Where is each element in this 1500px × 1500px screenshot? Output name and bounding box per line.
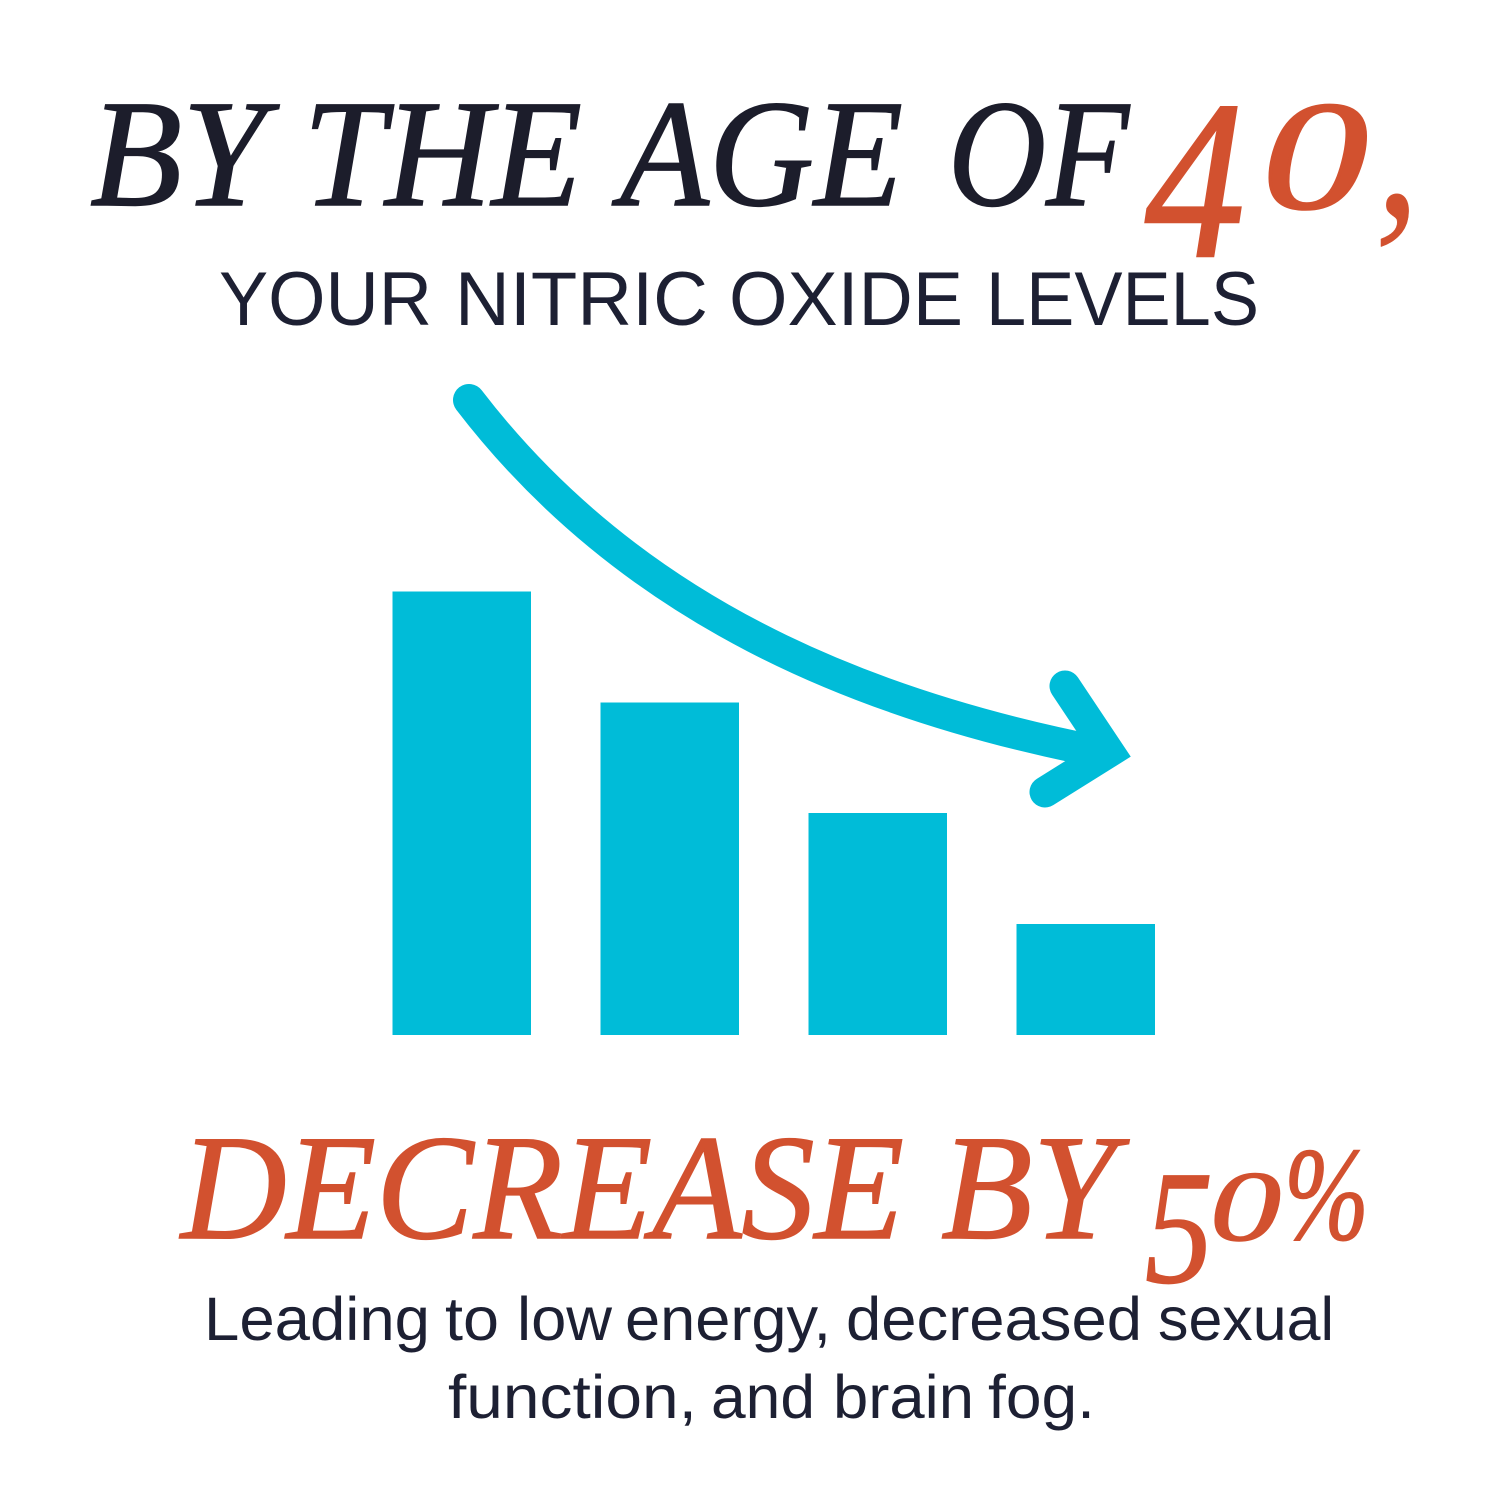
title: by the age of 40: BY (90, 70, 280, 239)
heading: decrease by 50%: 5 (1145, 1139, 1213, 1318)
title: by the age of 40: 4 (1145, 55, 1245, 305)
body text: low (517, 1285, 613, 1353)
title: by the age of 40: AGE (611, 70, 903, 239)
body text: fog. (988, 1363, 1095, 1431)
title: by the age of 40: THE (303, 70, 582, 239)
body text: decreased (846, 1285, 1142, 1353)
title: by the age of 40: 0 (1262, 70, 1368, 242)
subtitle (219, 257, 1259, 342)
heading: decrease by 50%: BY (941, 1105, 1130, 1271)
heading: decrease by 50%: 0 (1210, 1151, 1281, 1262)
arrow: downward trend (469, 400, 1109, 792)
title: by the age of 40: , (1375, 31, 1420, 260)
body text: to (445, 1285, 499, 1353)
body text: function, (448, 1363, 697, 1431)
title: by the age of 40 (90, 31, 1420, 305)
subtitle: NITRIC (455, 257, 708, 342)
body text: energy, (625, 1285, 831, 1353)
body text: Leading (204, 1285, 430, 1353)
body text: sexual (1158, 1285, 1334, 1353)
body text: brain (833, 1363, 974, 1431)
heading: decrease by 50%: % (1284, 1120, 1369, 1268)
body text: and (711, 1363, 815, 1431)
heading: decrease by 50% (179, 1105, 1369, 1318)
body text (204, 1285, 1334, 1431)
bar chart (392, 592, 1155, 1035)
subtitle: LEVELS (986, 257, 1259, 342)
subtitle: OXIDE (729, 257, 963, 342)
title: by the age of 40: OF (948, 70, 1130, 239)
subtitle: YOUR (219, 257, 432, 342)
heading: decrease by 50%: DECREASE (179, 1105, 904, 1271)
